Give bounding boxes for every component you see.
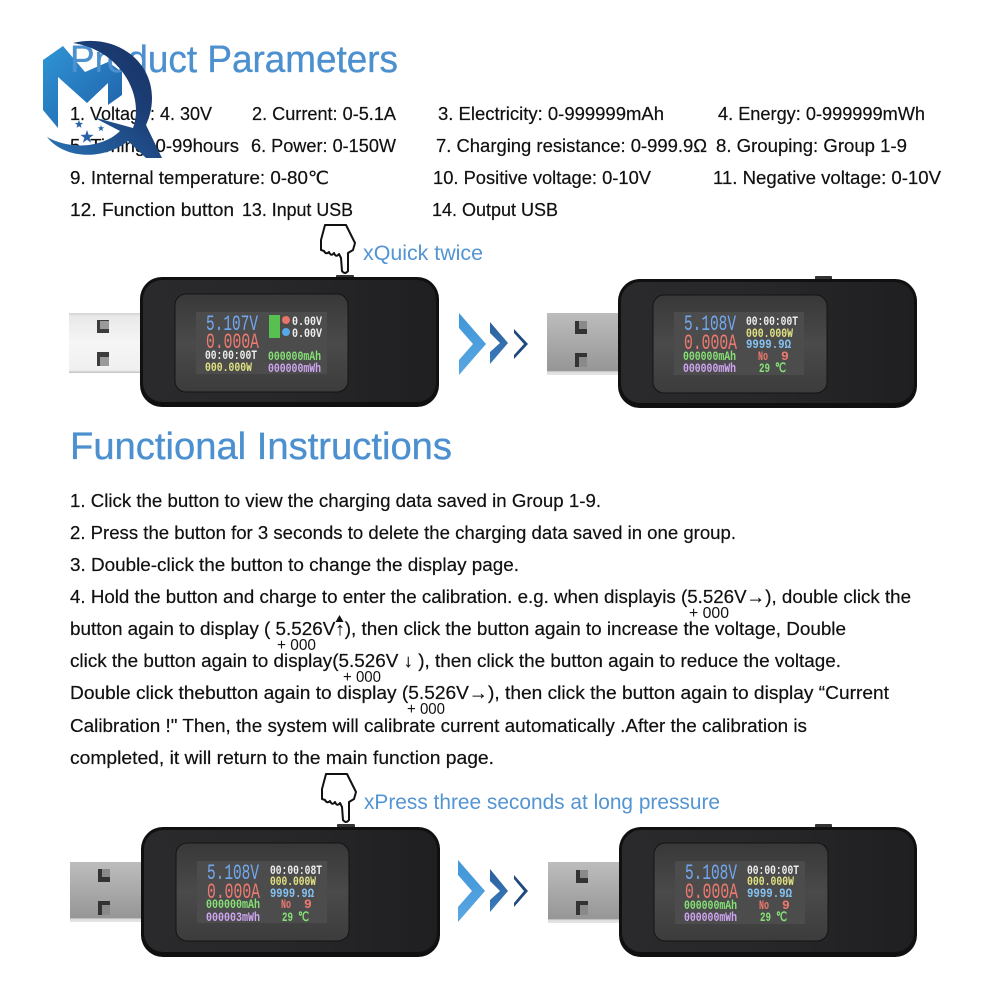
title: Product Parameters: Product Parameters: [70, 39, 398, 81]
instruction text: + 000: [407, 701, 445, 718]
lcd readings: 9: [782, 898, 790, 913]
lcd readings: 000.000W: [746, 326, 793, 341]
lcd readings: 00:00:00T: [205, 348, 257, 363]
parameter list: 3. Electricity: 0-999999mAh: [438, 104, 664, 124]
parameter list: 8. Grouping: Group 1-9: [716, 136, 907, 156]
body: [618, 279, 917, 408]
parameter list: 2. Current: 0-5.1A: [252, 104, 396, 124]
lcd readings: 000.000W: [747, 874, 794, 889]
instruction text: button again to display ( 5.526V↑), then click the button again to increase the voltage, Double: [70, 619, 846, 639]
device 3: tester with data page, long press: [70, 824, 440, 957]
lcd readings: 000000mWh: [684, 910, 737, 925]
button: [336, 275, 354, 278]
bezel: [653, 295, 827, 393]
lcd readings: No: [281, 897, 291, 912]
lcd readings: ℃: [776, 910, 787, 925]
instruction text: Double click thebutton again to display (5.526V→), then click the button again to display “Current: [70, 683, 889, 703]
caption: quick twice: xQuick twice: [363, 242, 483, 265]
usb plug: [70, 862, 142, 922]
instruction text: 2. Press the button for 3 seconds to delete the charging data saved in one group.: [70, 523, 736, 543]
lcd readings: No: [759, 898, 769, 913]
lcd readings: 0.000A: [207, 880, 261, 905]
button: [815, 276, 832, 280]
caption: press three seconds: xPress three seconds at long pressure: [364, 791, 720, 814]
parameter list: [70, 104, 941, 220]
device 2: tester with data page: [547, 276, 917, 408]
lcd readings: ℃: [298, 910, 309, 925]
lcd readings: 0.000A: [684, 331, 738, 356]
instruction text: click the button again to display(5.526V ↓ ), then click the button again to reduce the voltage.: [70, 651, 841, 671]
lcd readings: 0.000A: [685, 880, 739, 905]
logo: M letter: [43, 46, 122, 128]
bezel: [176, 843, 349, 941]
lcd readings: 000000mAh: [683, 349, 736, 364]
lcd readings: 0.000A: [206, 330, 260, 355]
lcd readings: 9: [781, 349, 789, 364]
body: [141, 827, 440, 957]
lcd readings: 5.108V: [207, 861, 260, 886]
parameter list: 5. Timing: 0-99hours: [70, 136, 239, 156]
instruction text: 4. Hold the button and charge to enter the calibration. e.g. when displayis (5.526V→), double click the: [70, 587, 911, 607]
lcd readings: 000003mWh: [206, 910, 260, 925]
lcd readings: 000000mWh: [268, 361, 321, 376]
lcd readings: 29: [759, 361, 770, 376]
lcd readings: [205, 312, 322, 376]
instruction text: 1. Click the button to view the charging data saved in Group 1-9.: [70, 491, 601, 511]
parameter list: 13. Input USB: [242, 200, 353, 220]
lcd readings: 000000mAh: [206, 897, 260, 912]
usb plug: [69, 313, 141, 373]
lcd readings: [683, 312, 798, 376]
lcd readings: No: [758, 349, 768, 364]
body: [619, 827, 917, 957]
lcd readings: 0.00V: [292, 314, 322, 329]
lcd readings: 000000mAh: [268, 349, 321, 364]
lcd readings: 29: [760, 910, 771, 925]
lcd: [675, 861, 805, 924]
parameter list: 7. Charging resistance: 0-999.9Ω: [436, 136, 707, 156]
lcd readings: 9: [304, 897, 312, 912]
lcd: [197, 861, 327, 923]
lcd readings: ℃: [775, 361, 786, 376]
lcd readings: 9999.9Ω: [746, 337, 791, 352]
icon: pointing hand, long press: [322, 774, 356, 822]
lcd readings: 9999.9Ω: [270, 886, 314, 901]
parameter list: 6. Power: 0-150W: [251, 136, 396, 156]
lcd readings: 00:00:08T: [270, 863, 322, 878]
logo: Q ring and stars: [47, 41, 162, 158]
lcd readings: [206, 861, 322, 925]
device 1: tester with voltage page: [69, 275, 439, 407]
icon: pointing hand, quick twice: [321, 225, 355, 273]
parameter list: 10. Positive voltage: 0-10V: [433, 168, 651, 188]
lcd readings: 000.000W: [270, 874, 316, 889]
lcd: [196, 312, 327, 374]
parameter list: 1. Voltage: 4. 30V: [70, 104, 212, 124]
instruction text: + 000: [343, 669, 381, 686]
instruction text: Calibration !" Then, the system will calibrate current automatically .After the calibration is: [70, 716, 807, 736]
arrows: first row: [459, 313, 528, 375]
usb plug: [548, 862, 620, 923]
parameter list: 9. Internal temperature: 0-80℃: [70, 168, 329, 188]
lcd readings: 0.00V: [292, 326, 322, 341]
arrows: second row: [458, 860, 528, 922]
parameter list: 12. Function button: [70, 200, 234, 220]
lcd readings: 5.108V: [685, 861, 738, 886]
instruction text: + 000: [689, 605, 729, 622]
lcd readings: 9999.9Ω: [747, 886, 792, 901]
bezel: [654, 843, 828, 941]
body: [140, 277, 439, 407]
lcd readings: 000000mAh: [684, 898, 737, 913]
lcd readings: 29: [282, 910, 293, 925]
lcd readings: 5.108V: [684, 312, 737, 337]
bezel: [175, 294, 348, 392]
lcd readings: 00:00:00T: [747, 863, 799, 878]
parameter list: 4. Energy: 0-999999mWh: [718, 104, 925, 124]
instruction text: completed, it will return to the main function page.: [70, 748, 494, 768]
lcd readings: 5.107V: [206, 312, 259, 337]
lcd readings: [684, 861, 799, 925]
lcd readings: 000.000W: [205, 360, 252, 375]
instruction text: + 000: [277, 637, 316, 654]
button: [337, 824, 355, 828]
heading: Functional Instructions: Functional Instructions: [70, 426, 452, 468]
parameter list: 11. Negative voltage: 0-10V: [713, 168, 941, 188]
lcd readings: 00:00:00T: [746, 314, 798, 329]
lcd readings: 000000mWh: [683, 361, 736, 376]
button: [815, 824, 832, 828]
usb plug: [547, 313, 619, 375]
instruction text: 3. Double-click the button to change the display page.: [70, 555, 519, 575]
instruction text: [70, 491, 911, 768]
lcd: [674, 312, 804, 375]
parameter list: 14. Output USB: [432, 200, 558, 220]
device 4: tester with data page, after reset: [548, 824, 917, 957]
